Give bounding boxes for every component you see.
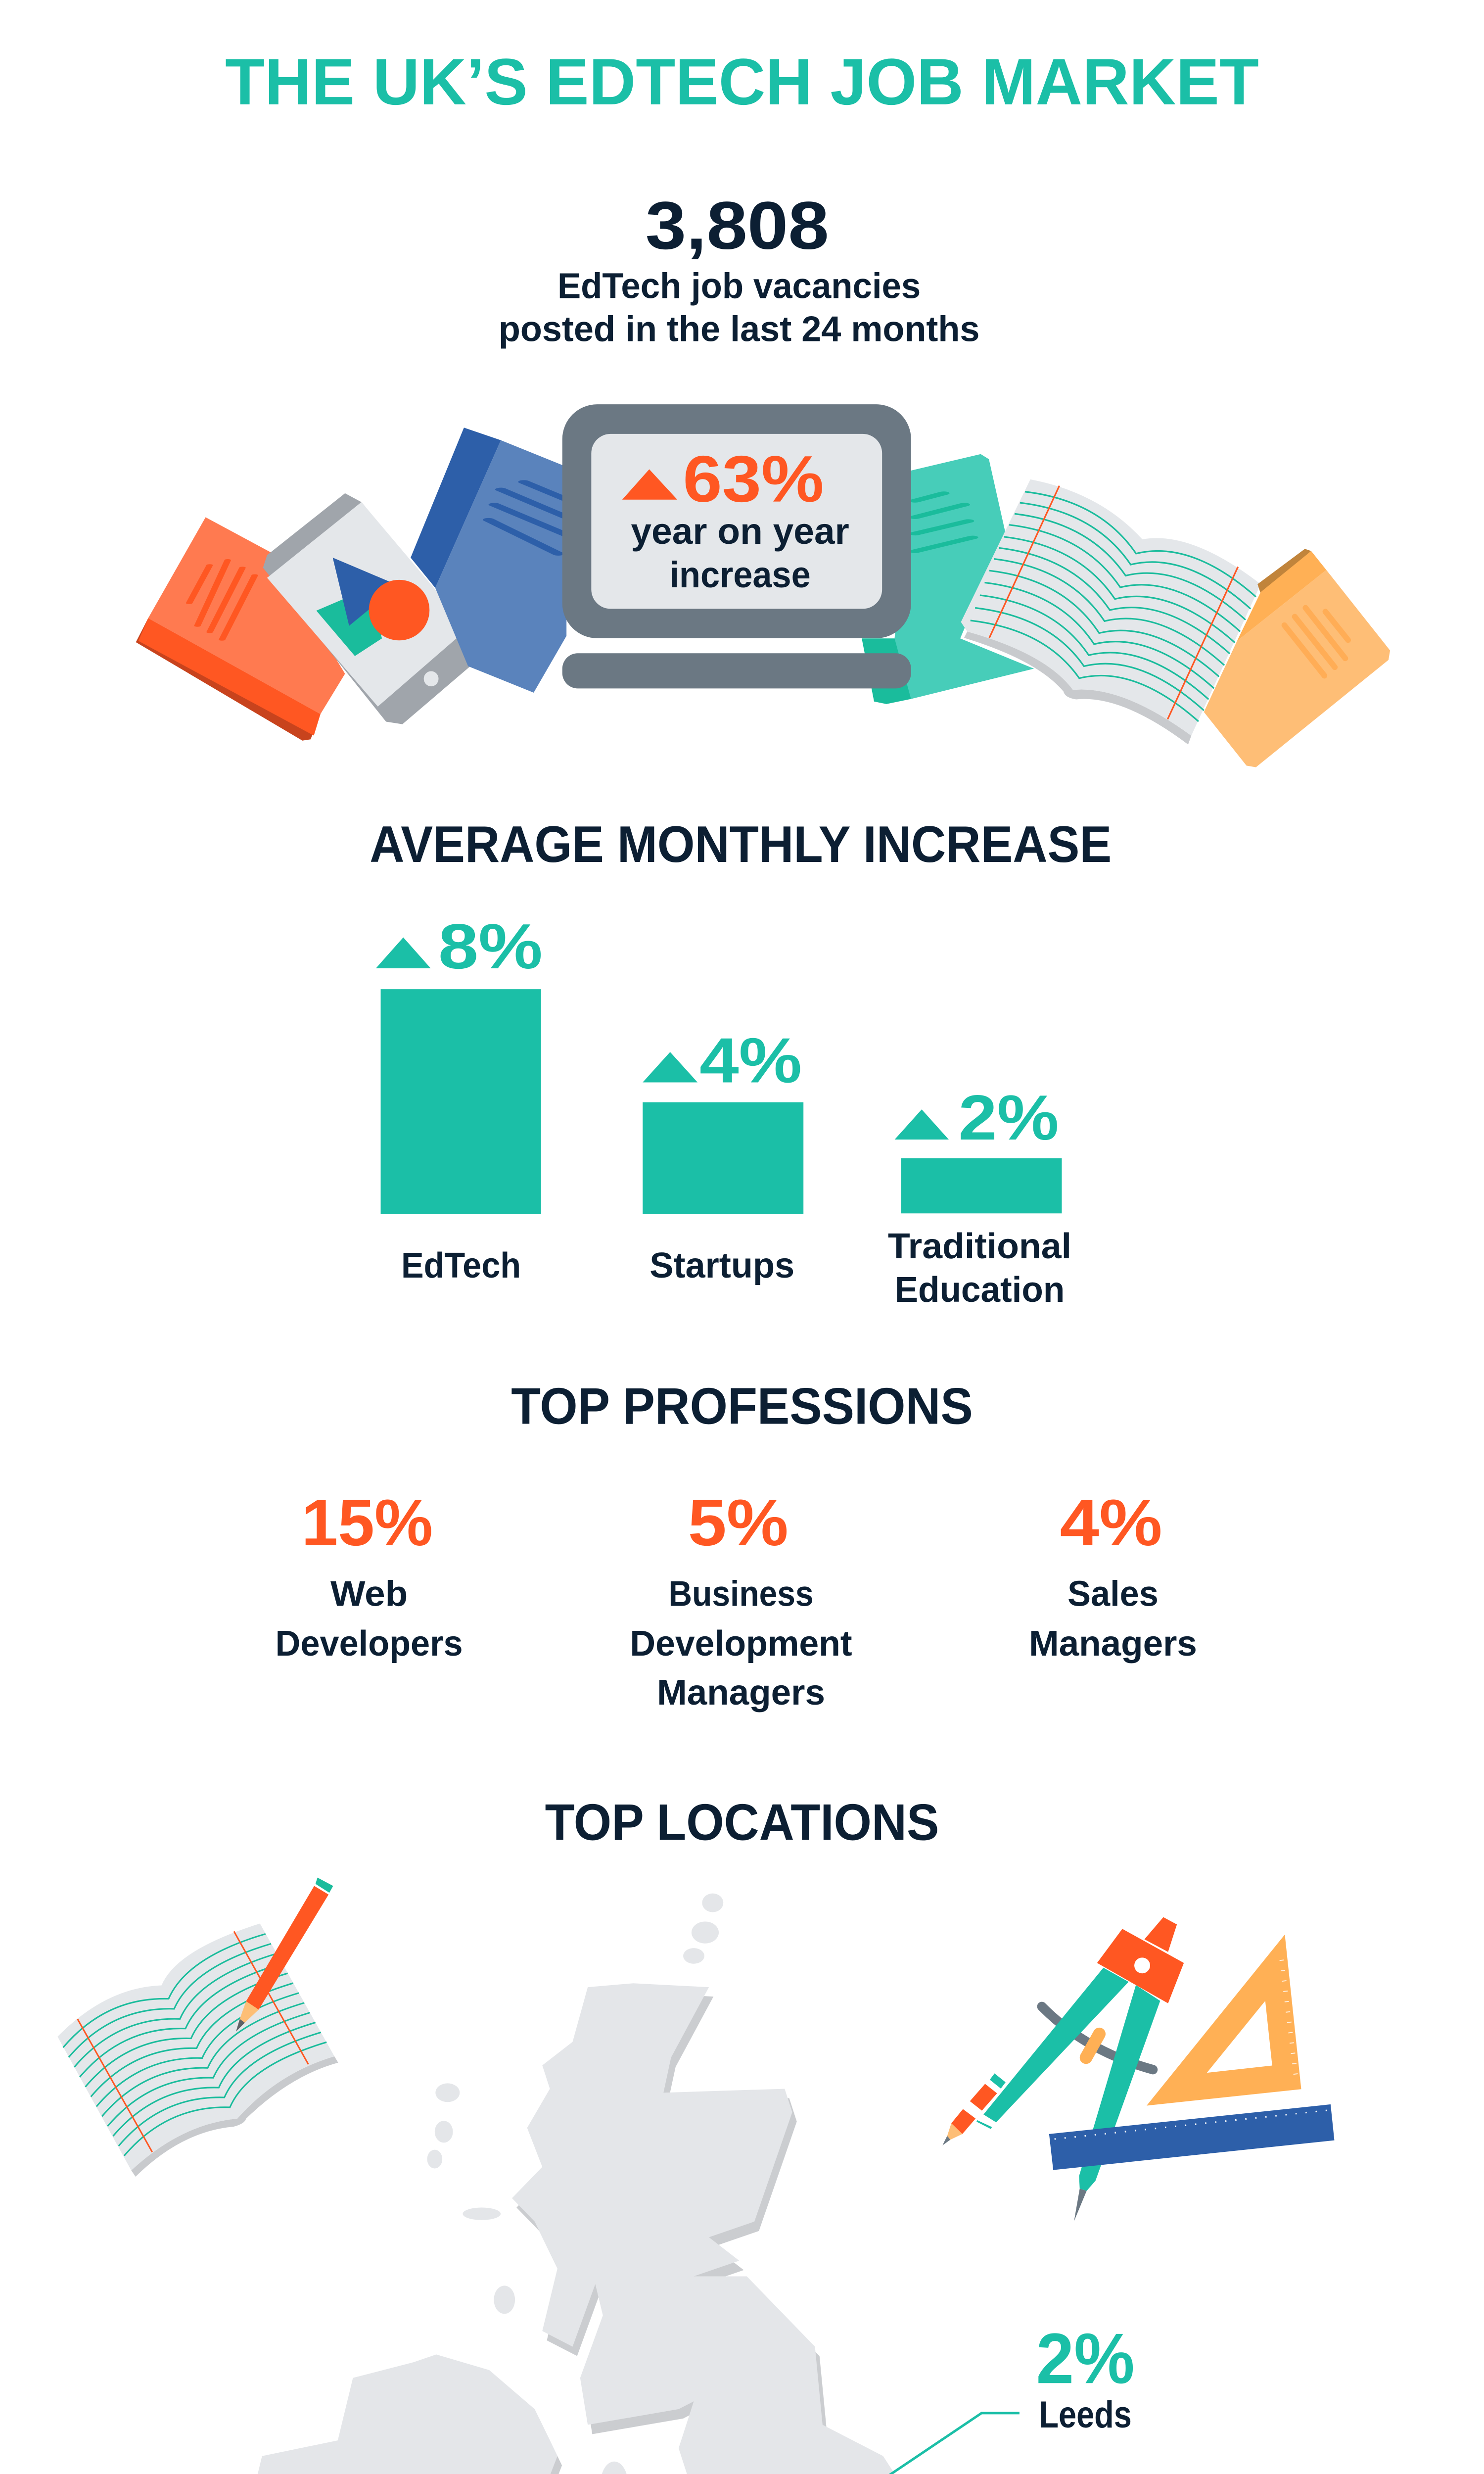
- bar: Traditional Education 2%: Traditional: [888, 1226, 1071, 1266]
- icon: yellow book: [1204, 549, 1390, 767]
- headline number: 3,808 vacancies: 3,808: [646, 188, 829, 263]
- heading: top professions: TOP PROFESSIONS: [511, 1377, 973, 1434]
- profession: sales managers: Sales: [1067, 1574, 1159, 1614]
- profession: web developers: [276, 1486, 463, 1664]
- headline number: 3,808 vacancies: [499, 188, 979, 349]
- bar: EdTech 8%: 8%: [438, 911, 543, 982]
- bar chart: monthly increase: [376, 911, 1071, 1310]
- monitor with 63% callout: [562, 404, 911, 688]
- bar: Traditional Education 2%: 2%: [958, 1082, 1059, 1153]
- profession: business development managers: Business: [669, 1574, 814, 1614]
- bar: EdTech 8%: [376, 911, 543, 1285]
- profession: business development managers: Development: [630, 1623, 852, 1664]
- bar: Startups 4%: Startups: [649, 1245, 794, 1285]
- callout: Leeds 2%: Leeds: [1039, 2394, 1132, 2436]
- monitor with 63% callout: 63%: [683, 443, 824, 516]
- callout: Leeds 2%: 2%: [1036, 2318, 1135, 2398]
- map: UK and Ireland: [201, 1894, 1058, 2474]
- profession: business development managers: Managers: [657, 1672, 825, 1713]
- bar: Startups 4%: 4%: [699, 1025, 802, 1096]
- headline number: 3,808 vacancies: EdTech job vacancies: [557, 266, 921, 306]
- title: THE UK’S EDTECH JOB MARKET: [225, 46, 1259, 119]
- monitor with 63% callout: year on year: [631, 511, 849, 552]
- heading: average monthly increase: AVERAGE MONTHLY INCREASE: [370, 815, 1112, 873]
- bar: EdTech 8%: EdTech: [401, 1245, 521, 1285]
- icon: notebook with pencil: [57, 1878, 338, 2177]
- profession: business development managers: 5%: [688, 1486, 788, 1560]
- icon: open notebook: [961, 479, 1261, 745]
- heading: top locations: TOP LOCATIONS: [545, 1794, 939, 1851]
- icon: orange book: [136, 517, 345, 741]
- profession: web developers: Developers: [276, 1623, 463, 1664]
- icon: blue book: [411, 428, 566, 693]
- professions list: [276, 1486, 1197, 1713]
- icon: teal book: [862, 454, 1034, 704]
- profession: sales managers: 4%: [1060, 1486, 1162, 1560]
- callout: Leeds 2%: [817, 2318, 1135, 2474]
- icon: compass, set square and ruler: [942, 1917, 1334, 2221]
- bar: Startups 4%: [643, 1025, 803, 1285]
- profession: sales managers: Managers: [1029, 1623, 1197, 1664]
- bar: Traditional Education 2%: [888, 1082, 1071, 1310]
- profession: business development managers: [630, 1486, 852, 1713]
- bar: Traditional Education 2%: Education: [895, 1270, 1065, 1310]
- illustration: books and devices: [136, 428, 1390, 767]
- profession: sales managers: [1029, 1486, 1197, 1664]
- profession: web developers: 15%: [301, 1486, 433, 1560]
- icon: tablet: [263, 493, 480, 724]
- profession: web developers: Web: [330, 1574, 408, 1614]
- monitor with 63% callout: increase: [670, 554, 811, 595]
- headline number: 3,808 vacancies: posted in the last 24 months: [499, 309, 979, 349]
